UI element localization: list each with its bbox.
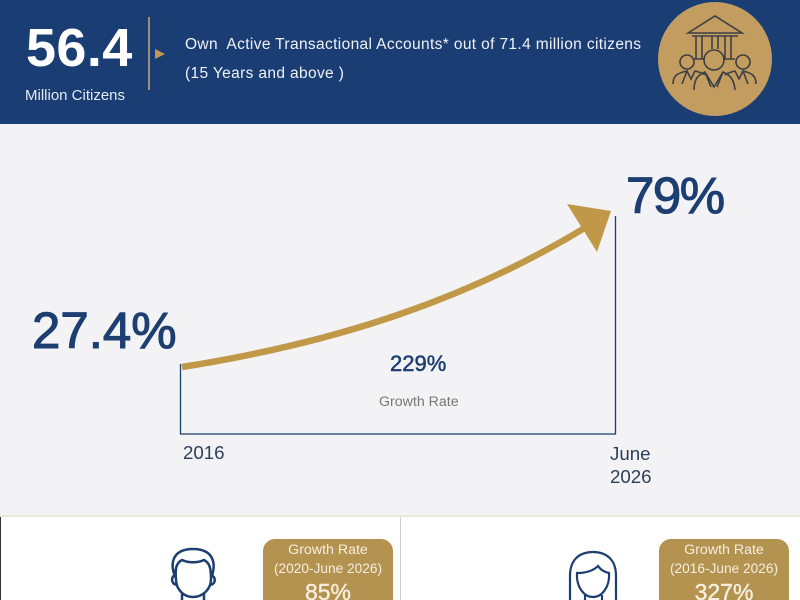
badge: women growth rate bbox=[659, 539, 789, 600]
badge: women growth rate: Growth Rate bbox=[684, 542, 764, 558]
vertical divider bbox=[400, 517, 401, 600]
axis label: 2016: 2016 bbox=[183, 442, 225, 463]
panel: growth chart bbox=[0, 124, 800, 517]
growth rate label: Growth Rate bbox=[379, 394, 459, 410]
divider with arrow bbox=[148, 17, 165, 90]
axis label: June 2026 bbox=[610, 443, 652, 487]
header band bbox=[0, 0, 800, 124]
value: 27.4%: 27.4% bbox=[32, 302, 177, 359]
icon: woman bbox=[568, 550, 618, 600]
panel: men bbox=[0, 517, 400, 600]
badge: women growth rate: (2016-June 2026) bbox=[670, 561, 778, 576]
growth percentage: 229% bbox=[390, 351, 446, 376]
description text: Own Active Transactional Accounts* out of 71.4 million citizens bbox=[185, 36, 641, 53]
panel: women bbox=[401, 517, 800, 600]
big number: 56.4: 56.4 bbox=[26, 18, 133, 78]
value: 79%: 79% bbox=[626, 167, 724, 224]
badge: men growth rate bbox=[263, 539, 393, 600]
axis label: June 2026: June bbox=[610, 443, 651, 464]
description text bbox=[185, 36, 641, 82]
axis label: June 2026: 2026 bbox=[610, 466, 652, 487]
badge: men growth rate: Growth Rate bbox=[288, 542, 368, 558]
icon: bank and citizens bbox=[658, 2, 772, 116]
icon: man bbox=[170, 548, 216, 600]
caption: million citizens: Million Citizens bbox=[25, 87, 125, 104]
chart axes and arrow bbox=[180, 204, 616, 435]
description text: (15 Years and above ) bbox=[185, 65, 344, 82]
badge: men growth rate: (2020-June 2026) bbox=[274, 561, 382, 576]
